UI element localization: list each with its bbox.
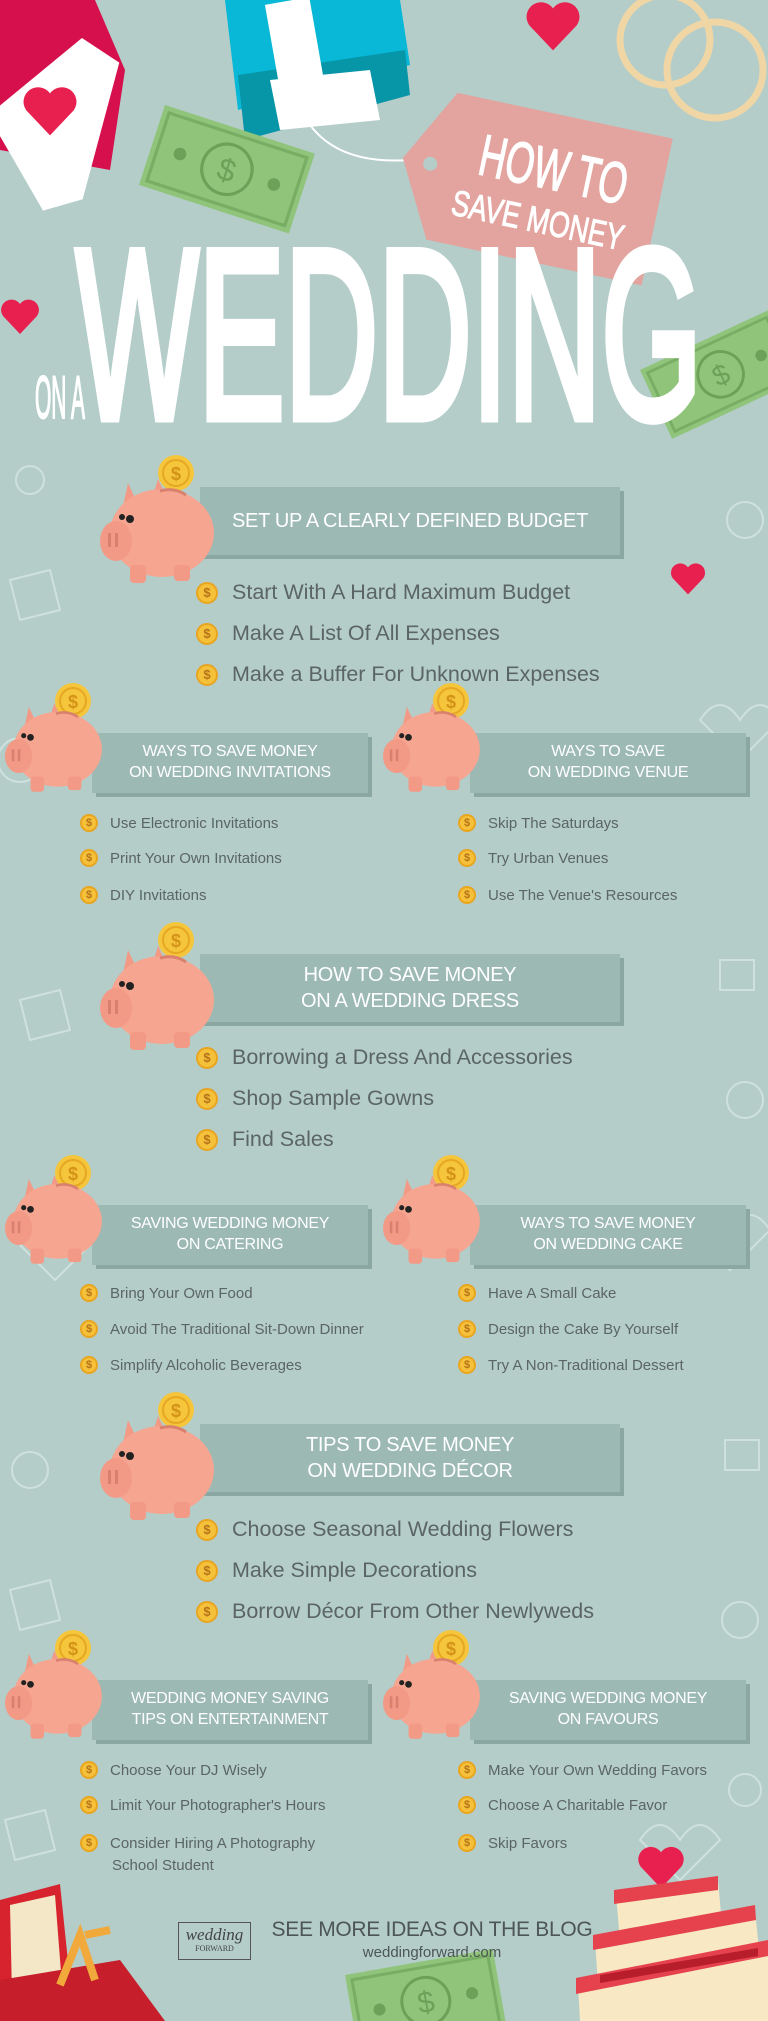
text: Use Electronic Invitations: [110, 814, 278, 832]
text: $: [203, 626, 211, 641]
panel: favours: ON FAVOURS: [558, 1711, 658, 1728]
text: Use The Venue's Resources: [488, 886, 677, 904]
text: $: [203, 667, 211, 682]
text: Try A Non-Traditional Dessert: [488, 1356, 684, 1374]
title: price tag: SAVE MONEY: [448, 182, 628, 258]
icon: money bottom: [345, 1949, 507, 2021]
text: Have A Small Cake: [488, 1284, 616, 1302]
text: Limit Your Photographer's Hours: [110, 1796, 326, 1814]
text: $: [86, 1799, 92, 1811]
panel: decor: [200, 1424, 620, 1492]
icon: cake: [576, 1847, 768, 2021]
text: $: [464, 889, 470, 901]
panel: catering: SAVING WEDDING MONEY: [131, 1215, 329, 1232]
panel: invitations: WAYS TO SAVE MONEY: [142, 743, 318, 760]
text: $: [86, 1837, 92, 1849]
text: Make Your Own Wedding Favors: [488, 1762, 707, 1778]
text: Shop Sample Gowns: [232, 1086, 434, 1110]
panel: catering: [92, 1205, 368, 1265]
icon: heart left: [1, 300, 39, 334]
text: $: [203, 1563, 211, 1578]
icon: heart top right: [527, 2, 579, 50]
icon: money bill top: [139, 105, 315, 234]
logo: wedding: [186, 1925, 243, 1944]
icon: heart small right: [671, 563, 705, 594]
text: $: [464, 1359, 470, 1371]
text: Consider Hiring A Photography: [110, 1834, 315, 1852]
text: $: [464, 817, 470, 829]
panel: cake: [470, 1205, 746, 1265]
text: Choose Seasonal Wedding Flowers: [232, 1517, 573, 1541]
list: entertainment & favours: [80, 1761, 707, 1874]
text: DIY Invitations: [110, 886, 206, 904]
icon: ring box: [0, 1884, 165, 2021]
text: $: [464, 1764, 470, 1776]
text: Print Your Own Invitations: [110, 850, 282, 866]
text: Skip Favors: [488, 1834, 567, 1852]
panel: cake: WAYS TO SAVE MONEY: [520, 1215, 696, 1232]
panel: venue: ON WEDDING VENUE: [528, 764, 688, 781]
footer text: [272, 1918, 592, 1961]
panel: dress: ON A WEDDING DRESS: [301, 990, 519, 1012]
list: decor: [196, 1517, 594, 1623]
panel: entertainment: WEDDING MONEY SAVING: [131, 1690, 329, 1707]
text: $: [464, 1837, 470, 1849]
panel: decor: TIPS TO SAVE MONEY: [306, 1434, 514, 1456]
panel: invitations: [92, 733, 368, 793]
text: Design the Cake By Yourself: [488, 1320, 678, 1338]
panel: decor: ON WEDDING DÉCOR: [307, 1460, 513, 1482]
text: Make a Buffer For Unknown Expenses: [232, 662, 600, 686]
text: $: [86, 817, 92, 829]
text: $: [86, 852, 92, 864]
panel: catering: ON CATERING: [177, 1236, 283, 1253]
icon: rings: [620, 0, 763, 118]
text: $: [203, 1132, 211, 1147]
list: budget: [196, 580, 600, 686]
text: Borrow Décor From Other Newlyweds: [232, 1599, 594, 1623]
footer text: SEE MORE IDEAS ON THE BLOG: [272, 1918, 592, 1941]
text: Avoid The Traditional Sit-Down Dinner: [110, 1320, 364, 1338]
panel: cake: ON WEDDING CAKE: [533, 1236, 683, 1253]
footer text: weddingforward.com: [363, 1944, 501, 1961]
panel: entertainment: TIPS ON ENTERTAINMENT: [132, 1711, 328, 1728]
text: $: [86, 889, 92, 901]
panel: venue: [470, 733, 746, 793]
text: Make A List Of All Expenses: [232, 621, 500, 645]
text: Find Sales: [232, 1127, 334, 1151]
icon: gift box: [225, 0, 410, 161]
text: $: [86, 1764, 92, 1776]
text: Bring Your Own Food: [110, 1284, 253, 1302]
icon: money right: [640, 310, 768, 439]
text: Choose Your DJ Wisely: [110, 1762, 267, 1778]
text: School Student: [112, 1857, 214, 1874]
text: Make Simple Decorations: [232, 1558, 477, 1582]
list: catering & cake: [80, 1284, 684, 1374]
text: $: [464, 1323, 470, 1335]
text: $: [203, 1522, 211, 1537]
logo: [178, 1922, 251, 1960]
text: $: [203, 1050, 211, 1065]
text: $: [86, 1359, 92, 1371]
icon: envelope: [0, 0, 169, 219]
title: price tag: [402, 93, 673, 286]
panel: invitations: ON WEDDING INVITATIONS: [129, 764, 331, 781]
text: $: [464, 1287, 470, 1299]
text: Borrowing a Dress And Accessories: [232, 1045, 573, 1069]
text: $: [203, 1091, 211, 1106]
text: Skip The Saturdays: [488, 814, 619, 832]
panel: favours: SAVING WEDDING MONEY: [509, 1690, 707, 1707]
text: Try Urban Venues: [488, 850, 608, 866]
text: $: [203, 1604, 211, 1619]
panel: entertainment: [92, 1680, 368, 1740]
text: Simplify Alcoholic Beverages: [110, 1356, 302, 1374]
panel: budget: [200, 487, 620, 555]
panel: dress: [200, 954, 620, 1022]
text: Start With A Hard Maximum Budget: [232, 580, 570, 604]
text: $: [203, 585, 211, 600]
text: Choose A Charitable Favor: [488, 1796, 667, 1814]
panel: budget: SET UP A CLEARLY DEFINED BUDGET: [232, 510, 588, 532]
panel: dress: HOW TO SAVE MONEY: [304, 964, 516, 986]
panel: venue: WAYS TO SAVE: [551, 743, 665, 760]
text: $: [464, 1799, 470, 1811]
text: $: [464, 852, 470, 864]
list: dress: [196, 1045, 573, 1151]
list: invitations & venue: [80, 814, 677, 904]
title: WEDDING: ON A: [35, 364, 85, 430]
text: $: [86, 1287, 92, 1299]
text: $: [86, 1323, 92, 1335]
panel: favours: [470, 1680, 746, 1740]
logo: FORWARD: [195, 1944, 234, 1953]
